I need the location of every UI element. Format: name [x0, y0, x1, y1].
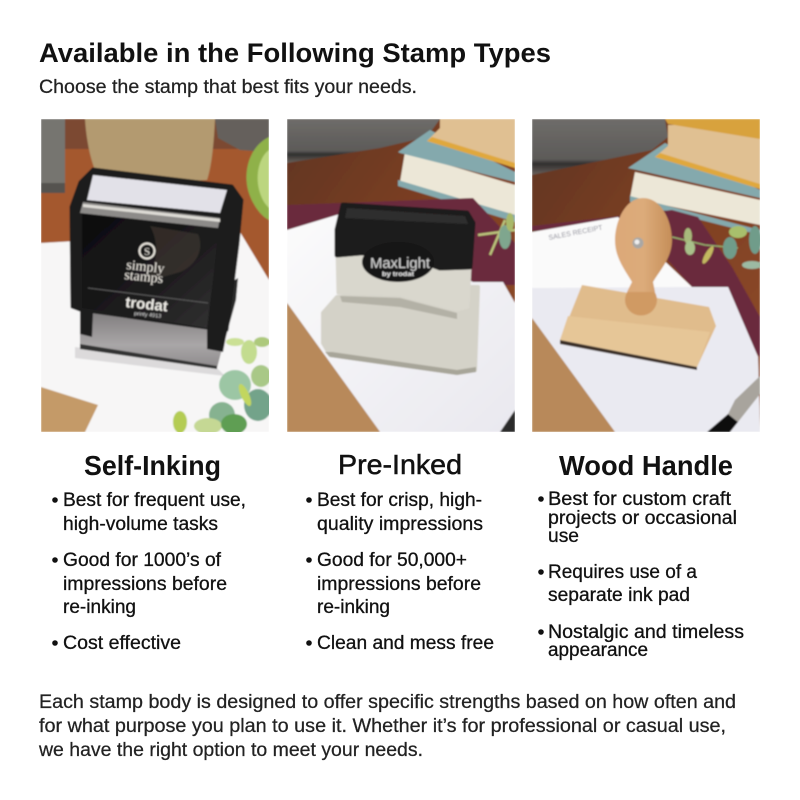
list: pre-inked benefits: Best for crisp, high- [317, 490, 482, 511]
closing paragraph: for what purpose you plan to use it. Whether it’s for professional or casual use, [39, 716, 726, 737]
heading: Pre-Inked: Pre-Inked [338, 449, 462, 480]
list: self-inking benefits [52, 490, 246, 654]
closing paragraph: we have the right option to meet your needs. [38, 740, 423, 761]
list: self-inking benefits: impressions before [63, 574, 227, 595]
heading: Wood Handle: Wood Handle [559, 450, 733, 481]
closing paragraph: Each stamp body is designed to offer specific strengths based on how often and [39, 692, 736, 713]
closing paragraph [38, 692, 736, 761]
heading: Self-Inking: Self-Inking [84, 450, 221, 481]
photo: self-inking stamp: printy 4913 [134, 311, 161, 320]
list: self-inking benefits: re-inking [63, 597, 136, 618]
photo: wood handle stamp: SALES RECEIPT [548, 224, 604, 242]
list: self-inking benefits: Cost effective [63, 633, 181, 654]
list: wood handle benefits: use [548, 526, 579, 547]
list: wood handle benefits: Best for custom craft [548, 489, 732, 510]
list: wood handle benefits: separate ink pad [548, 585, 690, 606]
title: Available in the Following Stamp Types [39, 38, 551, 68]
list: wood handle benefits: appearance [548, 640, 648, 661]
list: self-inking benefits: Good for 1000’s of [63, 550, 222, 571]
list: pre-inked benefits: quality impressions [317, 514, 483, 535]
photo: wood handle stamp [532, 119, 762, 432]
list: wood handle benefits: Requires use of a [548, 562, 697, 583]
list: pre-inked benefits: Clean and mess free [317, 633, 494, 654]
list: pre-inked benefits: re-inking [317, 597, 390, 618]
list: self-inking benefits: Best for frequent use, [63, 490, 246, 511]
photo: self-inking stamp: stamps [124, 268, 164, 287]
list: pre-inked benefits: impressions before [317, 574, 481, 595]
photo: pre-inked stamp: by trodat [382, 272, 414, 278]
photo: pre-inked stamp [287, 119, 515, 432]
list: self-inking benefits: high-volume tasks [63, 514, 218, 535]
subtitle: Choose the stamp that best fits your needs. [39, 77, 417, 98]
photo: self-inking stamp: S [144, 246, 150, 258]
photo: self-inking stamp: simply [126, 258, 165, 277]
list: wood handle benefits: Nostalgic and timeless [548, 622, 744, 643]
photo: self-inking stamp: trodat [125, 294, 169, 315]
list: pre-inked benefits [306, 490, 494, 654]
photo: pre-inked stamp: MaxLight [370, 255, 431, 272]
list: wood handle benefits [538, 489, 744, 661]
list: pre-inked benefits: Good for 50,000+ [317, 550, 467, 571]
photo: self-inking stamp [41, 119, 272, 434]
list: wood handle benefits: projects or occasional [548, 508, 737, 529]
